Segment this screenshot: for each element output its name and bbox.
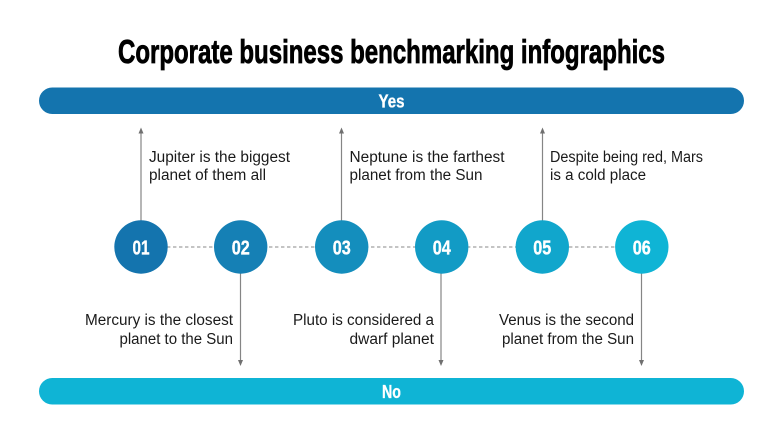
no bar xyxy=(39,378,744,404)
text: pluto xyxy=(293,312,435,348)
step 01: 01 xyxy=(132,237,150,259)
text: venus: planet from the Sun xyxy=(502,331,634,348)
arrow: 05 to yes xyxy=(540,128,545,221)
text: venus: Venus is the second xyxy=(499,312,634,329)
no bar: No xyxy=(382,382,401,402)
arrow: 06 to no xyxy=(639,273,644,366)
text: mars: is a cold place xyxy=(550,167,646,184)
step 02: 02 xyxy=(232,237,250,259)
text: pluto: dwarf planet xyxy=(350,331,435,348)
step 03 xyxy=(315,220,368,274)
yes bar: Yes xyxy=(378,91,404,111)
step 05 xyxy=(516,220,569,274)
text: neptune: Neptune is the farthest xyxy=(350,149,505,166)
step 02 xyxy=(214,220,267,274)
text: mercury xyxy=(85,312,234,348)
text: neptune xyxy=(350,149,505,184)
arrow: 02 to no xyxy=(238,273,243,366)
text: jupiter: Jupiter is the biggest xyxy=(149,149,291,166)
text: pluto: Pluto is considered a xyxy=(293,312,434,329)
dashed connector xyxy=(167,246,616,248)
step 06: 06 xyxy=(633,237,651,259)
text: jupiter: planet of them all xyxy=(149,167,266,184)
text: mercury: Mercury is the closest xyxy=(85,312,234,329)
text: jupiter xyxy=(149,149,291,184)
step 03: 03 xyxy=(333,237,351,259)
text: venus xyxy=(499,312,634,348)
arrow: 03 to yes xyxy=(339,128,344,221)
arrow: 04 to no xyxy=(438,273,444,366)
step 04 xyxy=(415,220,468,274)
arrow: 01 to yes xyxy=(138,128,144,221)
step 06 xyxy=(615,220,668,274)
text: mars: Despite being red, Mars xyxy=(550,149,703,166)
yes bar xyxy=(39,88,744,114)
text: neptune: planet from the Sun xyxy=(350,167,482,184)
step 04: 04 xyxy=(433,237,451,259)
step 05: 05 xyxy=(533,237,551,259)
step 01 xyxy=(114,220,168,274)
text: mars xyxy=(550,149,703,184)
text: mercury: planet to the Sun xyxy=(120,331,233,348)
